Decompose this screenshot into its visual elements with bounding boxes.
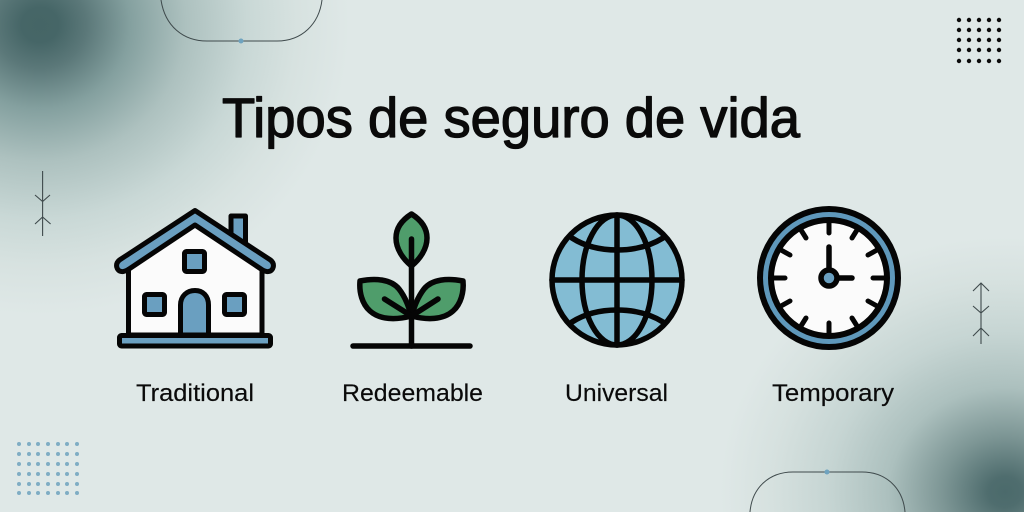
house roof xyxy=(117,210,273,272)
house base xyxy=(120,336,270,346)
label: Traditional: Traditional xyxy=(136,380,254,407)
clock hour ticks xyxy=(772,221,886,335)
icon: clock xyxy=(760,209,898,347)
plant leaf veins xyxy=(384,239,438,316)
globe central lines xyxy=(552,215,682,345)
clock outer ring xyxy=(760,209,898,347)
plant stem xyxy=(409,266,414,346)
decorative arc: bottom xyxy=(750,470,905,512)
globe parallels xyxy=(572,238,663,322)
label: Temporary: Temporary xyxy=(772,380,894,407)
plant top leaf xyxy=(396,214,427,266)
globe meridians xyxy=(582,215,652,345)
clock centre xyxy=(821,270,837,286)
icon: house xyxy=(117,210,273,346)
plant ground xyxy=(353,343,470,349)
clock face xyxy=(771,220,887,336)
decorative arrow mark: right xyxy=(973,283,989,344)
house walls xyxy=(128,222,262,335)
plant right leaf xyxy=(412,280,463,319)
house right window xyxy=(224,294,244,314)
clock hands xyxy=(829,247,852,278)
dot grid: top right xyxy=(957,18,1001,63)
icon: globe xyxy=(552,215,682,345)
icon: plant xyxy=(353,214,470,346)
house door xyxy=(180,290,208,335)
title: Tipos de seguro de vida xyxy=(222,86,801,149)
decorative arrow mark: left xyxy=(35,171,51,236)
house left window xyxy=(144,294,164,314)
decorative arc: top xyxy=(161,0,322,44)
house chimney xyxy=(231,216,246,253)
dot grid: bottom left xyxy=(17,442,79,495)
house top window xyxy=(184,252,204,272)
globe body xyxy=(552,215,682,345)
plant left leaf xyxy=(360,280,412,319)
label: Universal: Universal xyxy=(565,380,668,407)
label: Redeemable: Redeemable xyxy=(342,380,483,407)
